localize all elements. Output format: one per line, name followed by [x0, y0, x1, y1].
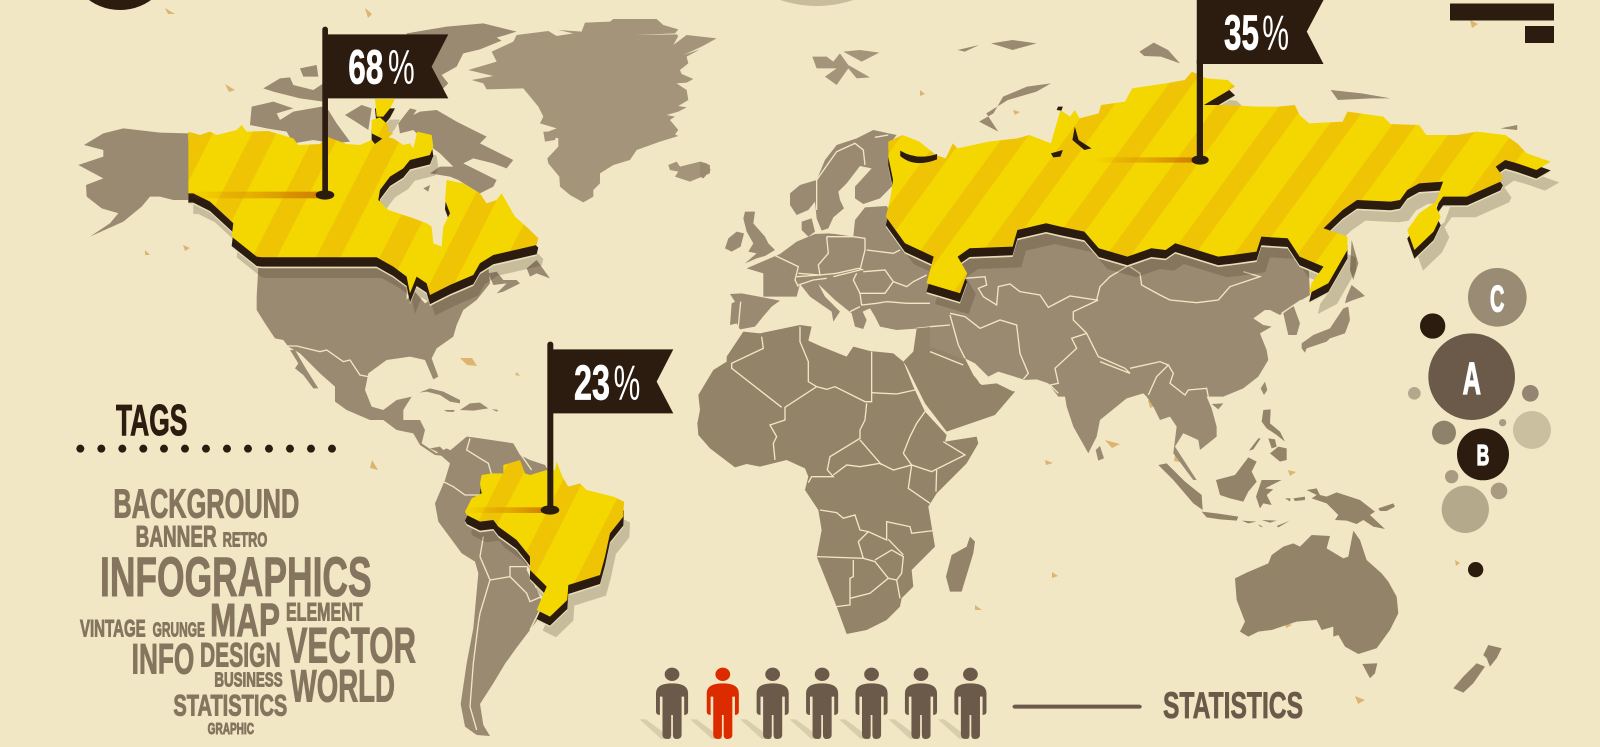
top-left cropped circle: [67, 0, 173, 10]
word cloud: DESIGN: [200, 637, 281, 675]
word cloud: ELEMENT: [286, 599, 363, 627]
highlighted country: Russia: [886, 72, 1559, 314]
bubble B: B: [1477, 440, 1489, 472]
bubble cluster A B C: [1408, 268, 1551, 577]
highlighted country: Brazil: [465, 460, 630, 637]
word cloud: INFOGRAPHICS: [100, 545, 372, 608]
word cloud: GRUNGE: [153, 619, 205, 642]
flag: 35% Russia: %: [1262, 5, 1289, 60]
person icons, one highlighted red: [656, 668, 986, 739]
USA, Mexico, Central America: [257, 260, 550, 457]
Canadian arctic islands and Alaska: [78, 23, 517, 237]
small decorative bubbles: [1408, 313, 1551, 577]
tags heading: TAGS: [116, 397, 187, 445]
word cloud: STATISTICS: [173, 690, 287, 723]
top-centre cropped circle: [702, 0, 932, 6]
flag: 23% Brazil: 23: [574, 355, 610, 410]
South America: [430, 437, 563, 736]
bubble A: [1428, 333, 1515, 420]
dotted divider: [76, 445, 336, 453]
top-right bars: [1450, 4, 1554, 43]
arctic islands north of Russia: [958, 40, 1517, 132]
bubble B: [1457, 428, 1509, 480]
word cloud: INFO: [132, 635, 194, 683]
Europe: [700, 130, 1000, 350]
connector line: [1012, 705, 1142, 709]
flag: 68% Canada: %: [388, 40, 415, 94]
figure shadows: [640, 719, 970, 739]
tags panel: [76, 397, 416, 738]
statistics label: STATISTICS: [1163, 685, 1303, 726]
word cloud: MAP: [210, 594, 280, 646]
bubble A: A: [1463, 353, 1481, 404]
statistics people row: [640, 668, 1142, 739]
word cloud: GRAPHIC: [208, 721, 254, 738]
word cloud: [80, 480, 416, 738]
bubble C: [1468, 268, 1527, 327]
bubble C: C: [1490, 279, 1504, 320]
word cloud: RETRO: [223, 529, 267, 552]
word cloud: BACKGROUND: [113, 480, 299, 526]
paper flecks: [145, 8, 1478, 704]
flag: 68% Canada: [316, 27, 448, 200]
word cloud: BUSINESS: [214, 669, 283, 692]
word cloud: WORLD: [291, 661, 395, 712]
word cloud: VINTAGE: [80, 616, 146, 643]
word cloud: BANNER: [136, 521, 217, 554]
flag: 35% Russia: [1192, 0, 1324, 165]
flag: 23% Brazil: [541, 342, 673, 515]
Southeast Asia and Oceania: [1158, 409, 1502, 693]
Asia: [930, 220, 1365, 480]
flag: 35% Russia: 35: [1224, 5, 1259, 60]
highlighted country: Canada: [188, 99, 543, 316]
flag: 68% Canada: 68: [348, 40, 383, 94]
Africa and Arabia: [697, 320, 1030, 634]
word cloud: VECTOR: [287, 618, 416, 674]
Greenland and Iceland: [468, 19, 879, 202]
flag: 23% Brazil: %: [614, 355, 640, 410]
